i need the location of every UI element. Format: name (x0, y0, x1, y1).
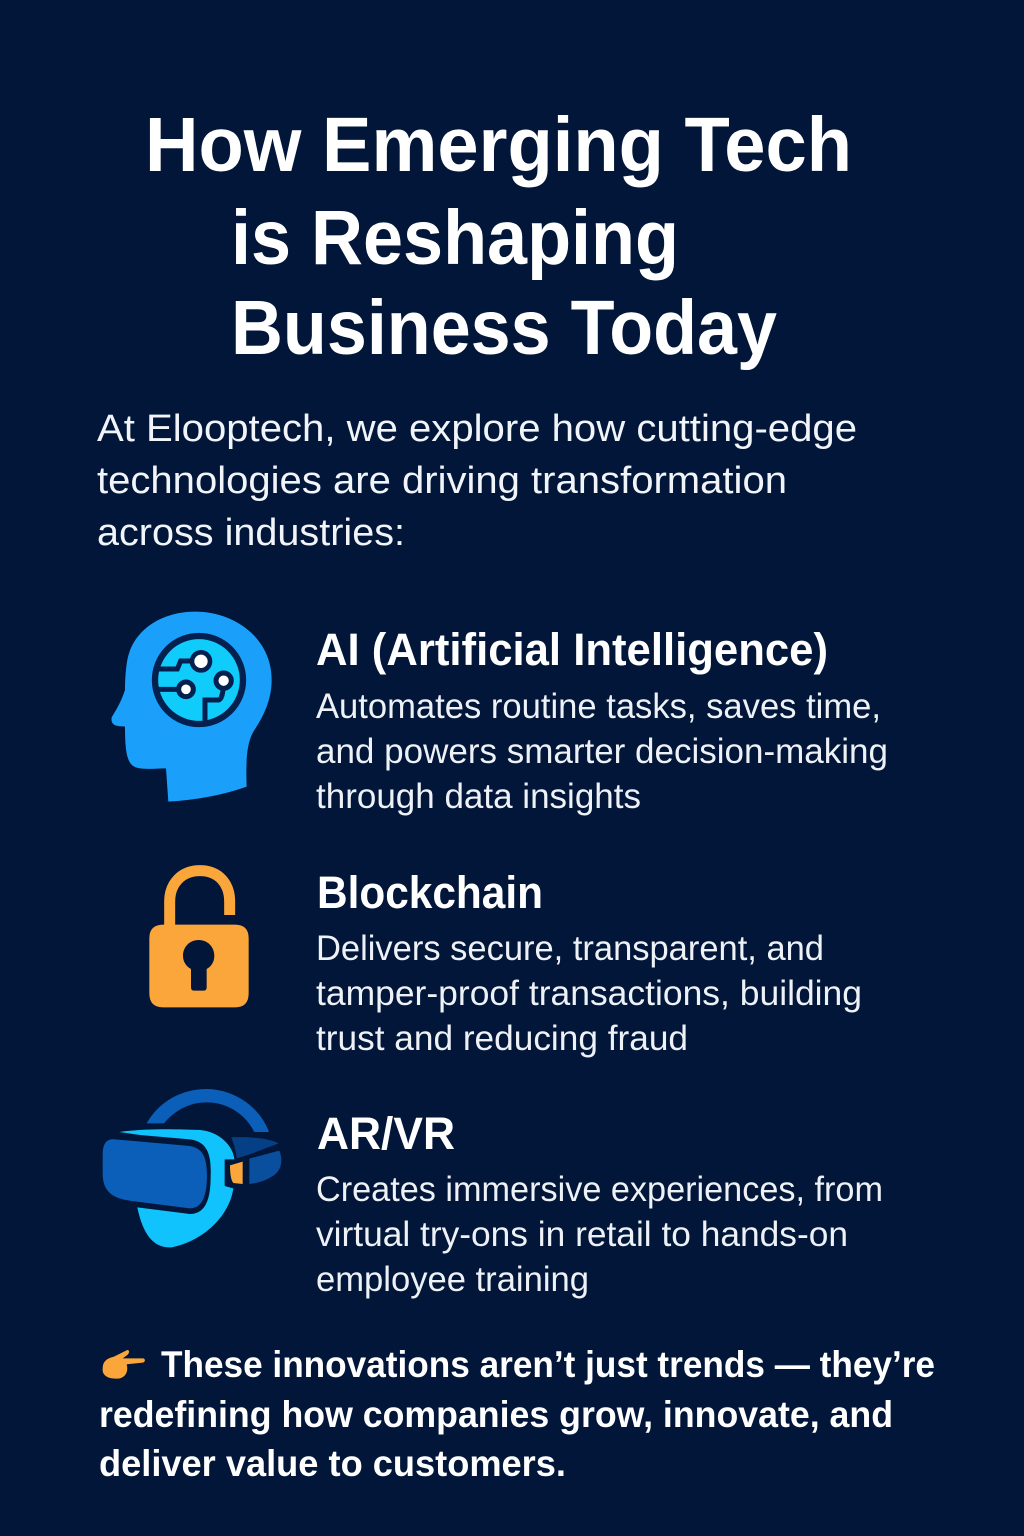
panel: Blockchain (149, 867, 862, 1058)
panel: AI (111, 612, 888, 816)
AR/VR description: employee training (316, 1260, 589, 1299)
AI description: Automates routine tasks, saves time, (316, 687, 881, 726)
callout (99, 1344, 935, 1484)
intro text (97, 408, 857, 554)
icon: padlock (149, 871, 249, 1007)
Blockchain description (316, 929, 862, 1058)
heading: AI: AI (Artificial Intelligence) (316, 624, 828, 675)
Blockchain description: tamper-proof transactions, building (316, 974, 862, 1013)
title (145, 102, 852, 371)
intro text: At Elooptech, we explore how cutting-edge (97, 408, 857, 450)
AI description (316, 687, 888, 816)
callout: redefining how companies grow, innovate, and (99, 1394, 893, 1435)
icon: VR headset (103, 1089, 281, 1247)
icon: pointing hand (103, 1350, 145, 1379)
icon: head with circuit brain (111, 612, 272, 802)
heading: AR/VR: AR/VR (317, 1108, 455, 1159)
title: is Reshaping (231, 195, 679, 281)
callout: deliver value to customers. (99, 1443, 566, 1484)
AI description: and powers smarter decision-making (316, 732, 888, 771)
panel: AR/VR (103, 1089, 883, 1299)
AI description: through data insights (316, 777, 641, 816)
AR/VR description: Creates immersive experiences, from (316, 1170, 883, 1209)
intro text: across industries: (97, 512, 405, 554)
Blockchain description: trust and reducing fraud (316, 1019, 688, 1058)
callout text: These innovations aren’t just trends — they’re (161, 1344, 935, 1385)
title: How Emerging Tech (145, 102, 852, 188)
heading: Blockchain: Blockchain (317, 867, 543, 918)
title: Business Today (231, 285, 777, 371)
Blockchain description: Delivers secure, transparent, and (316, 929, 824, 968)
intro text: technologies are driving transformation (97, 460, 787, 502)
AR/VR description: virtual try-ons in retail to hands-on (316, 1215, 848, 1254)
AR/VR description (316, 1170, 883, 1299)
